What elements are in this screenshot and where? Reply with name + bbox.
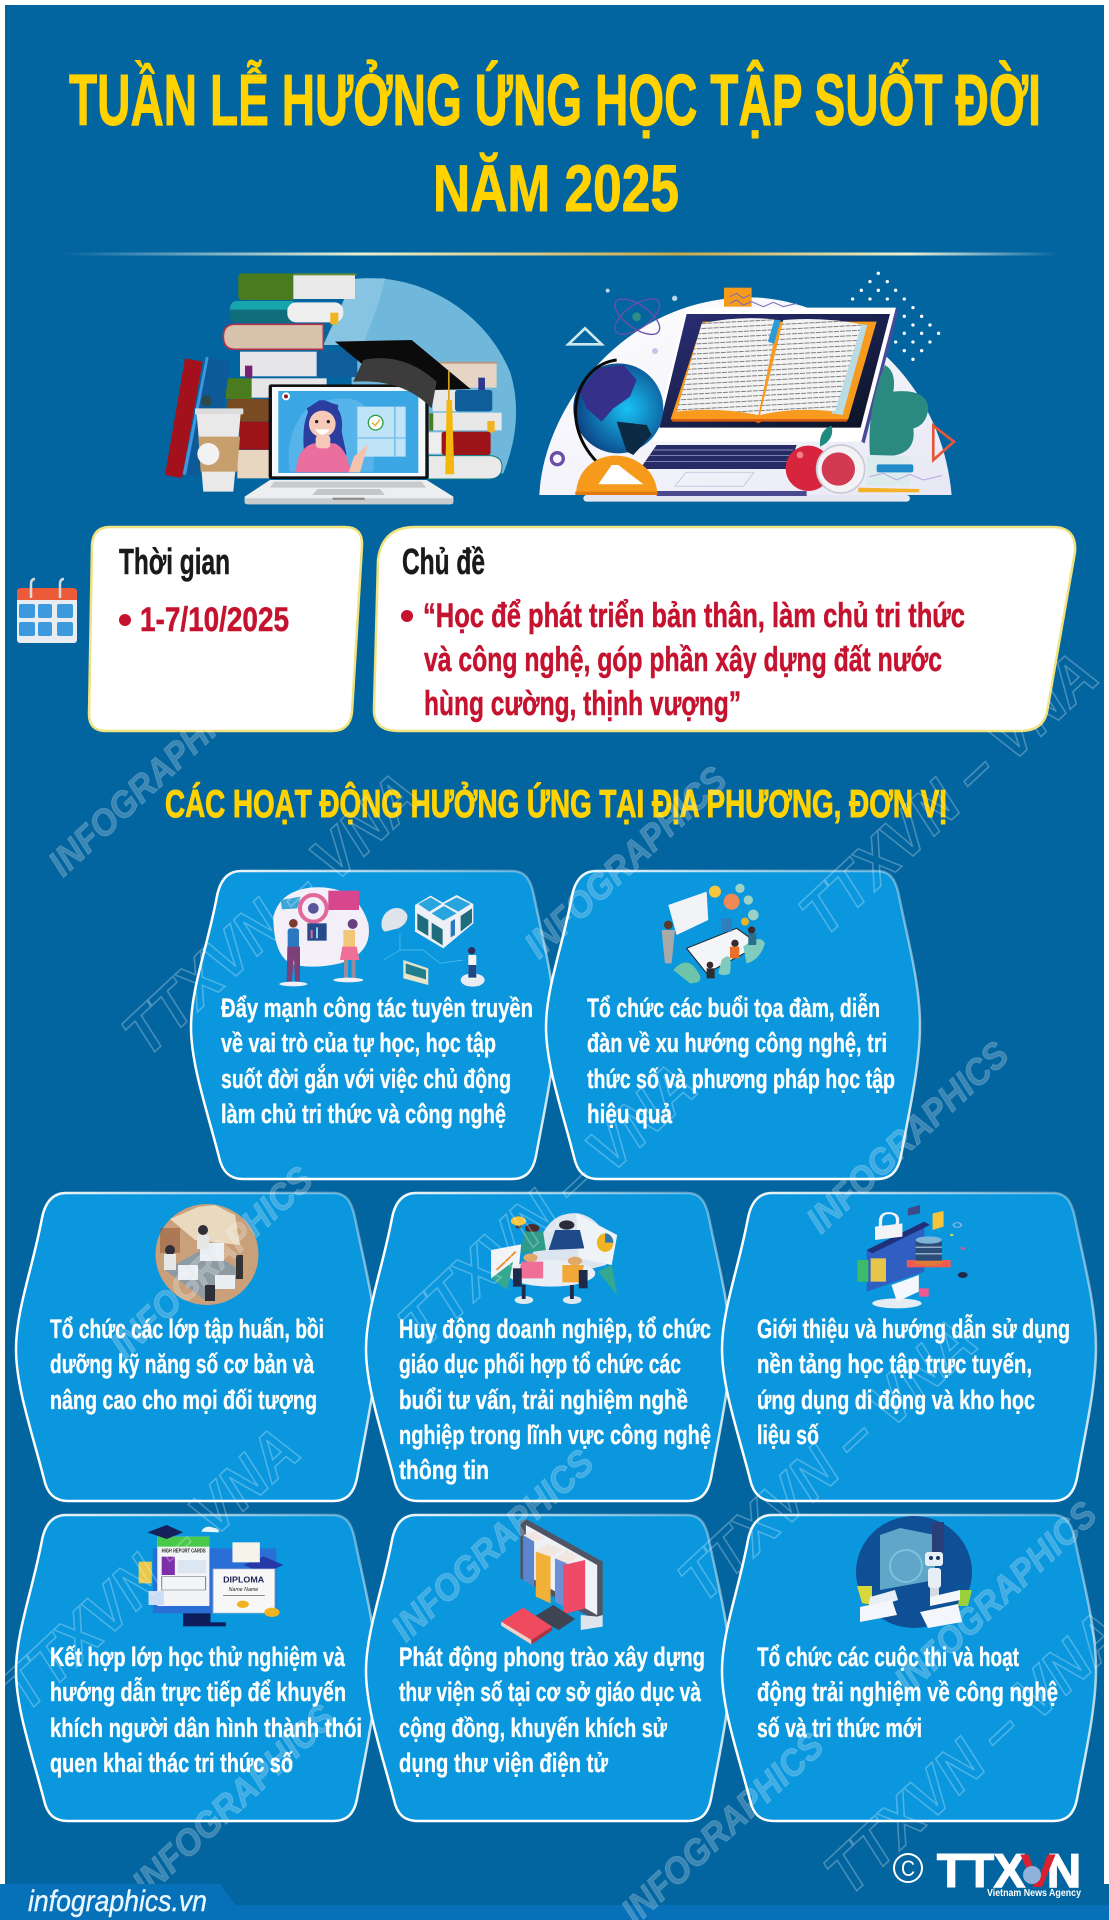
icon: calendar xyxy=(17,579,77,643)
text xyxy=(50,1642,362,1778)
illustration: open book on laptop with globe and apple xyxy=(539,272,954,502)
text: nghiệp trong lĩnh vực công nghệ xyxy=(399,1420,711,1450)
icon: learning platform monitor xyxy=(857,1205,968,1308)
text xyxy=(399,1642,705,1778)
text: cộng đồng, khuyến khích sử xyxy=(399,1713,667,1743)
icon: diploma on monitor xyxy=(139,1525,283,1626)
card: trial classes xyxy=(16,1515,376,1821)
text: về vai trò của tự học, học tập xyxy=(221,1028,496,1058)
text: làm chủ tri thức và công nghệ xyxy=(221,1099,506,1129)
text: nâng cao cho mọi đối tượng xyxy=(50,1385,317,1415)
illustration: books, graduation cap and laptop xyxy=(165,273,516,504)
text xyxy=(757,1642,1058,1743)
watermarks: TTXVN – VNA xyxy=(665,1306,990,1615)
text: dưỡng kỹ năng số cơ bản và xyxy=(50,1349,315,1379)
card: online platforms xyxy=(722,1193,1096,1501)
text: Huy động doanh nghiệp, tổ chức xyxy=(399,1314,711,1344)
text: Tổ chức các lớp tập huấn, bồi xyxy=(50,1314,324,1344)
logo: TTXVN: Vietnam News Agency xyxy=(987,1888,1081,1899)
text: số và tri thức mới xyxy=(757,1713,922,1743)
text: hiệu quả xyxy=(587,1099,673,1129)
icon: robot in lab xyxy=(856,1516,972,1628)
text: khích người dân hình thành thói xyxy=(50,1713,362,1743)
text: quen khai thác tri thức số xyxy=(50,1748,293,1778)
icon: books on monitor xyxy=(501,1519,603,1644)
panel: theme: hùng cường, thịnh vượng” xyxy=(424,685,741,723)
card: training classes xyxy=(16,1193,376,1501)
watermarks: INFOGRAPHICS xyxy=(102,1158,321,1366)
watermarks: INFOGRAPHICS xyxy=(516,758,735,966)
title: NĂM 2025 xyxy=(433,151,679,225)
icon: diploma on monitor: HIGH REPORT CARDS xyxy=(162,1549,206,1554)
text: liệu số xyxy=(757,1420,819,1450)
text: buổi tư vấn, trải nghiệm nghề xyxy=(399,1385,688,1415)
text xyxy=(399,1314,711,1485)
panel: theme xyxy=(374,527,1075,731)
logo: TTXVN xyxy=(894,1844,1081,1899)
title xyxy=(69,59,1041,225)
logo: TTXVN: C xyxy=(901,1856,915,1881)
card: competitions xyxy=(722,1515,1096,1821)
logo: TTXVN: N xyxy=(1047,1844,1081,1897)
card: communication xyxy=(191,871,555,1179)
card: enterprises xyxy=(366,1193,730,1501)
icon: people with data blob and server xyxy=(273,887,485,987)
text: hướng dẫn trực tiếp để khuyến xyxy=(50,1676,346,1707)
footer: website band: infographics.vn xyxy=(28,1885,207,1918)
panel: time: 1-7/10/2025 xyxy=(140,601,289,639)
icon: diploma on monitor: Name Name xyxy=(229,1586,258,1592)
text xyxy=(587,992,895,1129)
text: Đẩy mạnh công tác tuyên truyền xyxy=(221,993,533,1023)
panel: time xyxy=(89,527,362,731)
watermarks xyxy=(0,640,1109,1920)
text: Tổ chức các buổi tọa đàm, diễn xyxy=(587,992,880,1023)
icon: classroom photo xyxy=(156,1204,258,1305)
text xyxy=(757,1313,1070,1450)
text xyxy=(50,1314,324,1415)
icon: diploma on monitor: DIPLOMA xyxy=(223,1576,264,1585)
text: thông tin xyxy=(399,1455,489,1485)
watermarks: INFOGRAPHICS xyxy=(124,1696,343,1904)
logo: TTXVN: TTX xyxy=(937,1844,1025,1897)
logo: TTXVN: V xyxy=(1020,1844,1057,1897)
watermarks: INFOGRAPHICS xyxy=(798,1033,1017,1241)
text: đàn về xu hướng công nghệ, tri xyxy=(587,1028,887,1058)
text: Phát động phong trào xây dựng xyxy=(399,1642,705,1672)
panel: theme: Chủ đề xyxy=(402,541,485,582)
icon: team meeting xyxy=(662,884,765,983)
card: seminars xyxy=(546,871,920,1179)
text: suốt đời gắn với việc chủ động xyxy=(221,1063,511,1094)
text: thư viện số tại cơ sở giáo dục và xyxy=(399,1677,702,1707)
card: digital library xyxy=(366,1515,730,1821)
watermarks: TTXVN – VNA xyxy=(109,760,434,1069)
icon: business meeting xyxy=(491,1213,617,1304)
watermarks: INFOGRAPHICS xyxy=(383,1441,602,1649)
panel: time: Thời gian xyxy=(119,541,230,582)
text: thức số và phương pháp học tập xyxy=(587,1064,895,1094)
watermarks: INFOGRAPHICS xyxy=(40,676,259,884)
text: giáo dục phối hợp tổ chức các xyxy=(399,1349,681,1379)
watermarks: TTXVN – VNA xyxy=(385,1051,710,1360)
text xyxy=(221,993,533,1129)
text: dụng thư viện điện tử xyxy=(399,1748,608,1778)
text: Kết hợp lớp học thử nghiệm và xyxy=(50,1642,346,1672)
